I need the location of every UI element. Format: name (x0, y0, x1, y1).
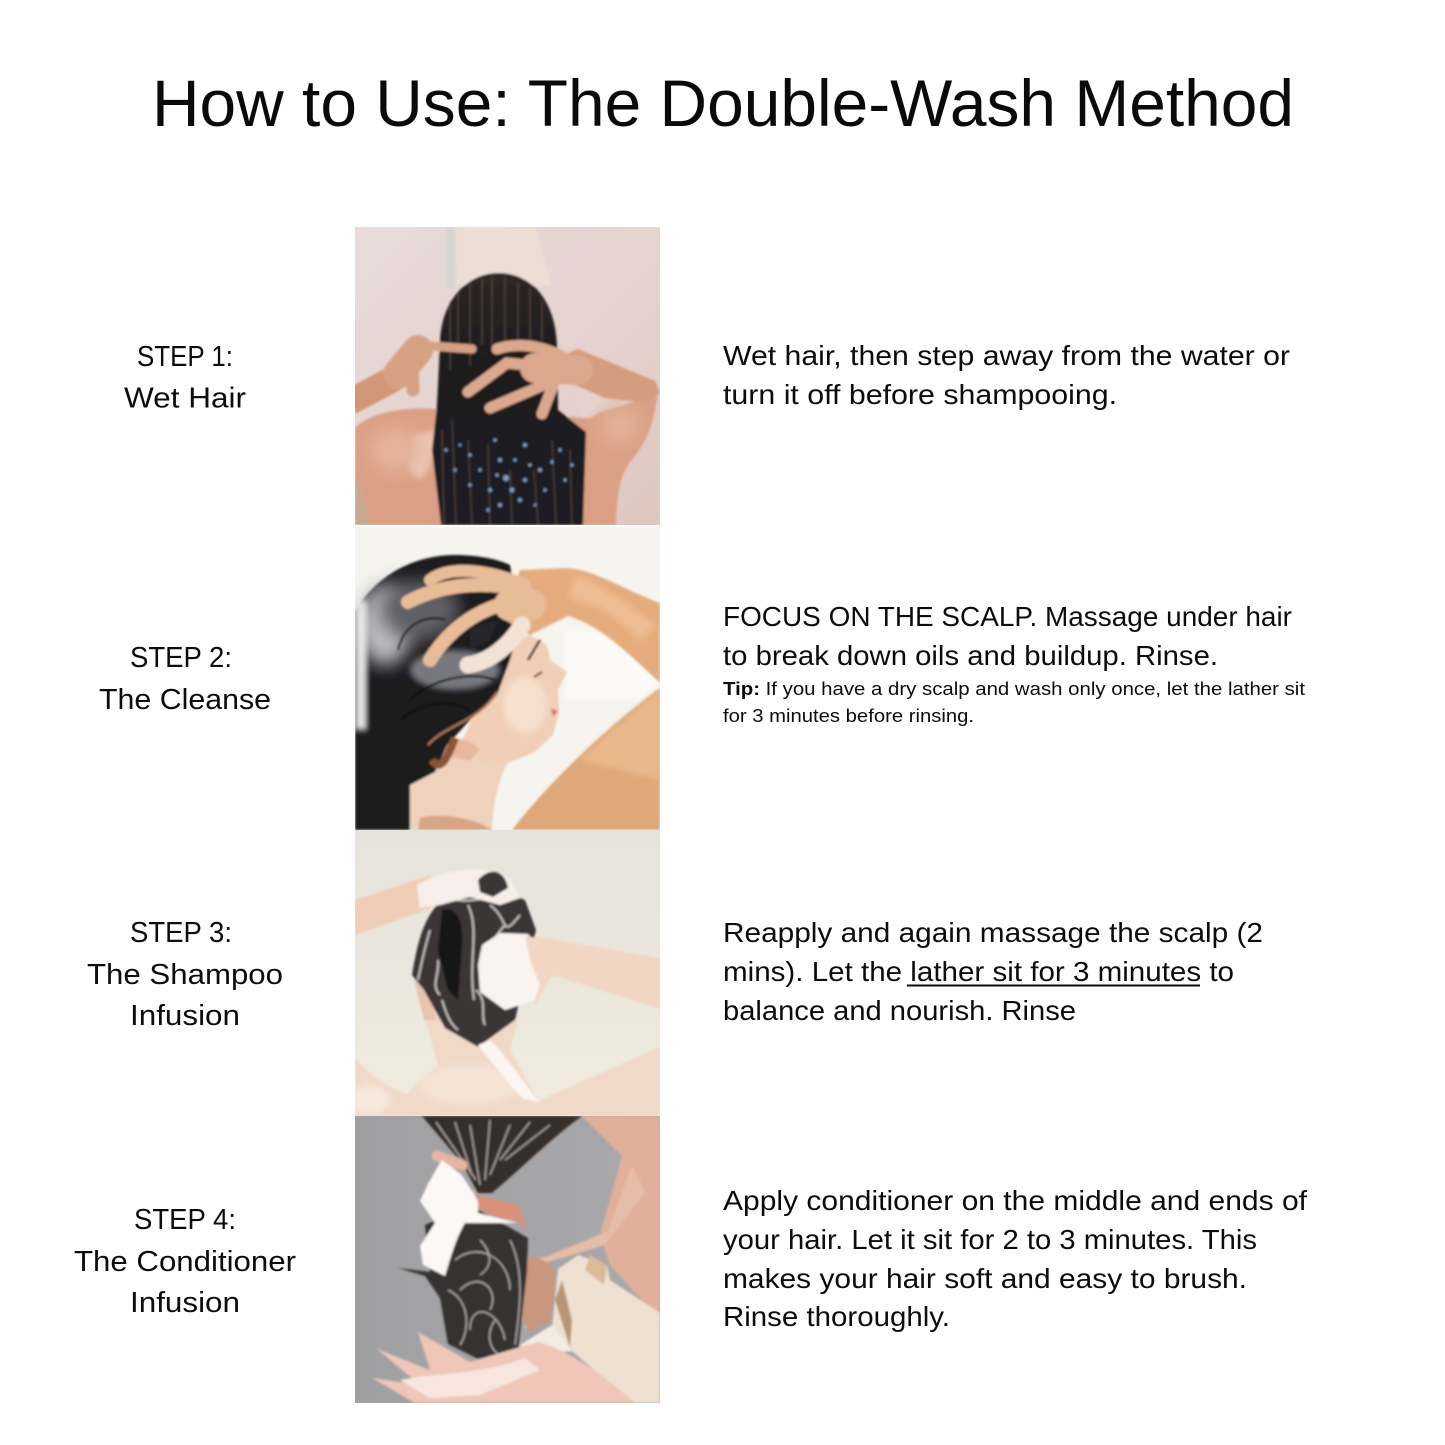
foam (420, 1160, 518, 1276)
step 4 description: makes your hair soft and easy to brush. (723, 1263, 1247, 1294)
step 2 description: FOCUS ON THE SCALP. Massage under hair (723, 601, 1292, 632)
right arm (525, 934, 660, 1009)
lower arm (512, 688, 660, 830)
ears (414, 978, 436, 1020)
step 2 label: STEP 2: (130, 642, 232, 674)
gap between forearm and upper arm (581, 416, 584, 420)
left hand (398, 345, 472, 390)
hair (412, 893, 536, 1047)
towel (552, 1255, 660, 1403)
right forearm (568, 348, 660, 402)
left arm (350, 378, 395, 402)
step 4 description: your hair. Let it sit for 2 to 3 minutes. This (723, 1224, 1257, 1255)
neck and shoulder (408, 756, 508, 830)
step 1 label: STEP 1: (137, 341, 233, 373)
fingers (432, 1156, 470, 1195)
hair (355, 555, 520, 830)
hand and arm (505, 568, 660, 683)
step 3 label (87, 917, 283, 1032)
step 2 label (99, 642, 271, 716)
foam trail (478, 1040, 540, 1103)
step 1 label (124, 341, 247, 414)
step 4 description: Rinse thoroughly. (723, 1301, 950, 1332)
face (458, 635, 567, 768)
step 3 description: mins). Let the lather sit for 3 minutes to (723, 956, 1234, 987)
raised arm and torso (582, 1116, 660, 1320)
step 1 description (723, 340, 1290, 410)
step 3 description (723, 917, 1263, 1026)
upper hair (422, 1116, 582, 1193)
step 3 label: The Shampoo (87, 959, 283, 991)
lower hair (398, 1205, 528, 1359)
step 4 description (723, 1185, 1307, 1332)
title: How to Use: The Double-Wash Method (152, 66, 1294, 140)
step 1 description: turn it off before shampooing. (723, 379, 1117, 410)
foam hand (478, 933, 548, 1010)
step 4 label (74, 1204, 297, 1319)
step 2 description: for 3 minutes before rinsing. (723, 705, 974, 726)
photo: lathered shampoo on the head (350, 830, 660, 1116)
step 1 description: Wet hair, then step away from the water or (723, 340, 1290, 371)
step 1 label: Wet Hair (124, 382, 247, 414)
hair (432, 273, 586, 525)
lower hand (372, 1332, 635, 1403)
shoulders and neck (355, 1010, 660, 1116)
photo: massaging the scalp (355, 527, 660, 830)
step 3 label: Infusion (130, 1000, 240, 1032)
step 2 description: to break down oils and buildup. Rinse. (723, 640, 1218, 671)
right hand (468, 346, 578, 414)
gripping hand (478, 1195, 528, 1230)
step 2 label: The Cleanse (99, 684, 271, 716)
photo: conditioner on mid-lengths and ends (355, 1116, 660, 1403)
left arm (355, 875, 440, 935)
step 4 label: STEP 4: (134, 1204, 236, 1236)
step 4 label: Infusion (130, 1287, 240, 1319)
step 3 description: balance and nourish. Rinse (723, 995, 1076, 1026)
back and shoulders (355, 388, 658, 525)
step 3 label: STEP 3: (130, 917, 232, 949)
step 2 description: Tip: If you have a dry scalp and wash only once, let the lather sit (723, 678, 1305, 699)
top foam hand (417, 869, 520, 908)
step 2 description (723, 601, 1305, 726)
step 3 description: Reapply and again massage the scalp (2 (723, 917, 1263, 948)
step 4 description: Apply conditioner on the middle and ends of (723, 1185, 1307, 1216)
photo: wetting hair in the shower (350, 227, 660, 525)
step 4 label: The Conditioner (74, 1246, 297, 1278)
